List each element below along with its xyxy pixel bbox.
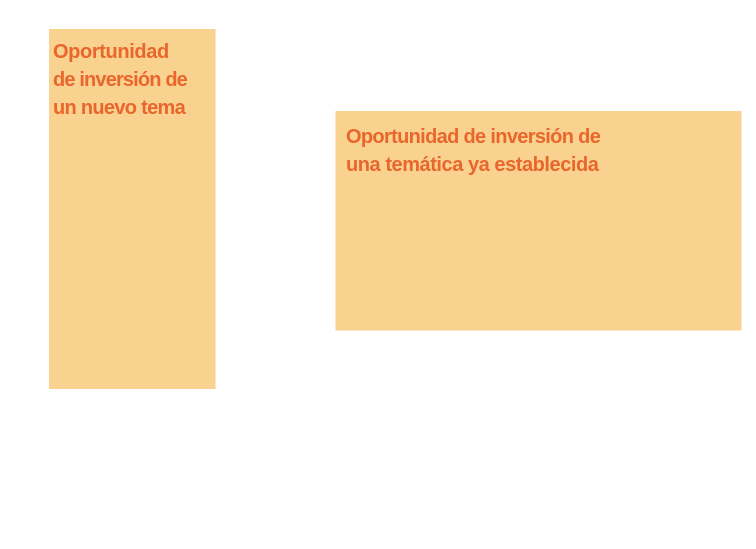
heading: new theme: un nuevo tema: [53, 97, 185, 119]
heading: new theme: de inversión de: [53, 69, 187, 91]
heading: new theme: Oportunidad: [53, 41, 169, 63]
heading: established theme: [346, 126, 600, 176]
panel: established theme investment opportunity: [336, 111, 742, 330]
heading: established theme: Oportunidad de inversión de: [346, 126, 600, 148]
heading: new theme: [53, 41, 188, 119]
heading: established theme: una temática ya establecida: [346, 154, 598, 176]
panel: new theme investment opportunity: [49, 29, 216, 389]
